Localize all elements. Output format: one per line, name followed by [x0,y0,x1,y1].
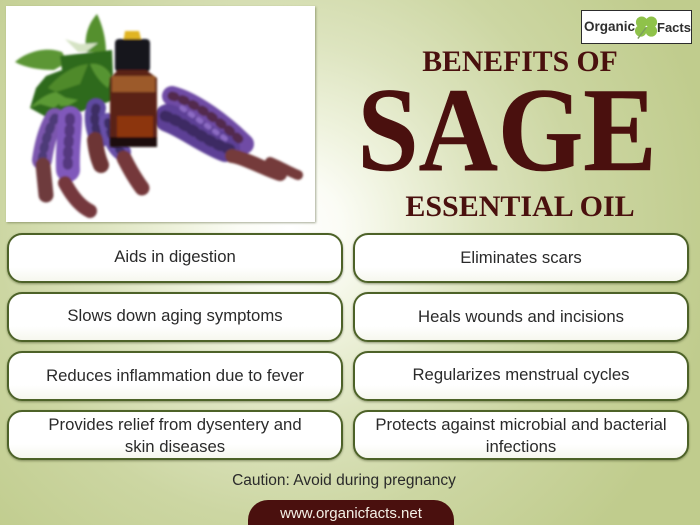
icon: essential oil bottle [110,31,157,147]
heading: sage: SAGE [357,62,657,196]
panel: photo of sage and oil bottle [6,6,318,224]
footer: website [248,500,454,525]
benefit: inflammation: Reduces inflammation due to fever [46,366,304,385]
benefit: aging: Slows down aging symptoms [67,306,283,325]
benefit: digestion [7,233,343,283]
benefit: inflammation [7,351,343,401]
icon: sage leaves [15,14,114,118]
logo word: Facts: Facts [657,20,691,35]
benefit: scars: Eliminates scars [460,248,582,267]
caution note: Caution: Avoid during pregnancy [232,472,456,489]
icon: flower spikes middle [95,108,142,188]
icon: flower spikes left [42,118,90,211]
benefit: dysentery: Provides relief from dysentery and [48,415,302,434]
benefit: infections: infections [486,437,556,456]
benefit: infections: Protects against microbial and bacterial [375,415,667,434]
benefit: dysentery: skin diseases [125,437,225,456]
icon: green clover [634,16,658,39]
benefit: wounds [353,292,689,342]
benefit: menstrual cycles: Regularizes menstrual cycles [412,364,630,384]
benefit: infections [353,410,689,460]
logo word: Organic: Organic [584,19,635,34]
benefit: dysentery [7,410,343,460]
benefit: wounds: Heals wounds and incisions [418,307,624,326]
heading: essential oil: ESSENTIAL OIL [405,190,635,223]
benefit: scars [353,233,689,283]
footer: website: www.organicfacts.net [280,505,422,522]
benefit: digestion: Aids in digestion [114,246,236,266]
benefit: aging [7,292,343,342]
icon: flower spike right [165,96,298,175]
benefit: menstrual cycles [353,351,689,401]
logo: Organic Facts [581,10,692,44]
heading: benefits of: BENEFITS OF [422,46,618,78]
